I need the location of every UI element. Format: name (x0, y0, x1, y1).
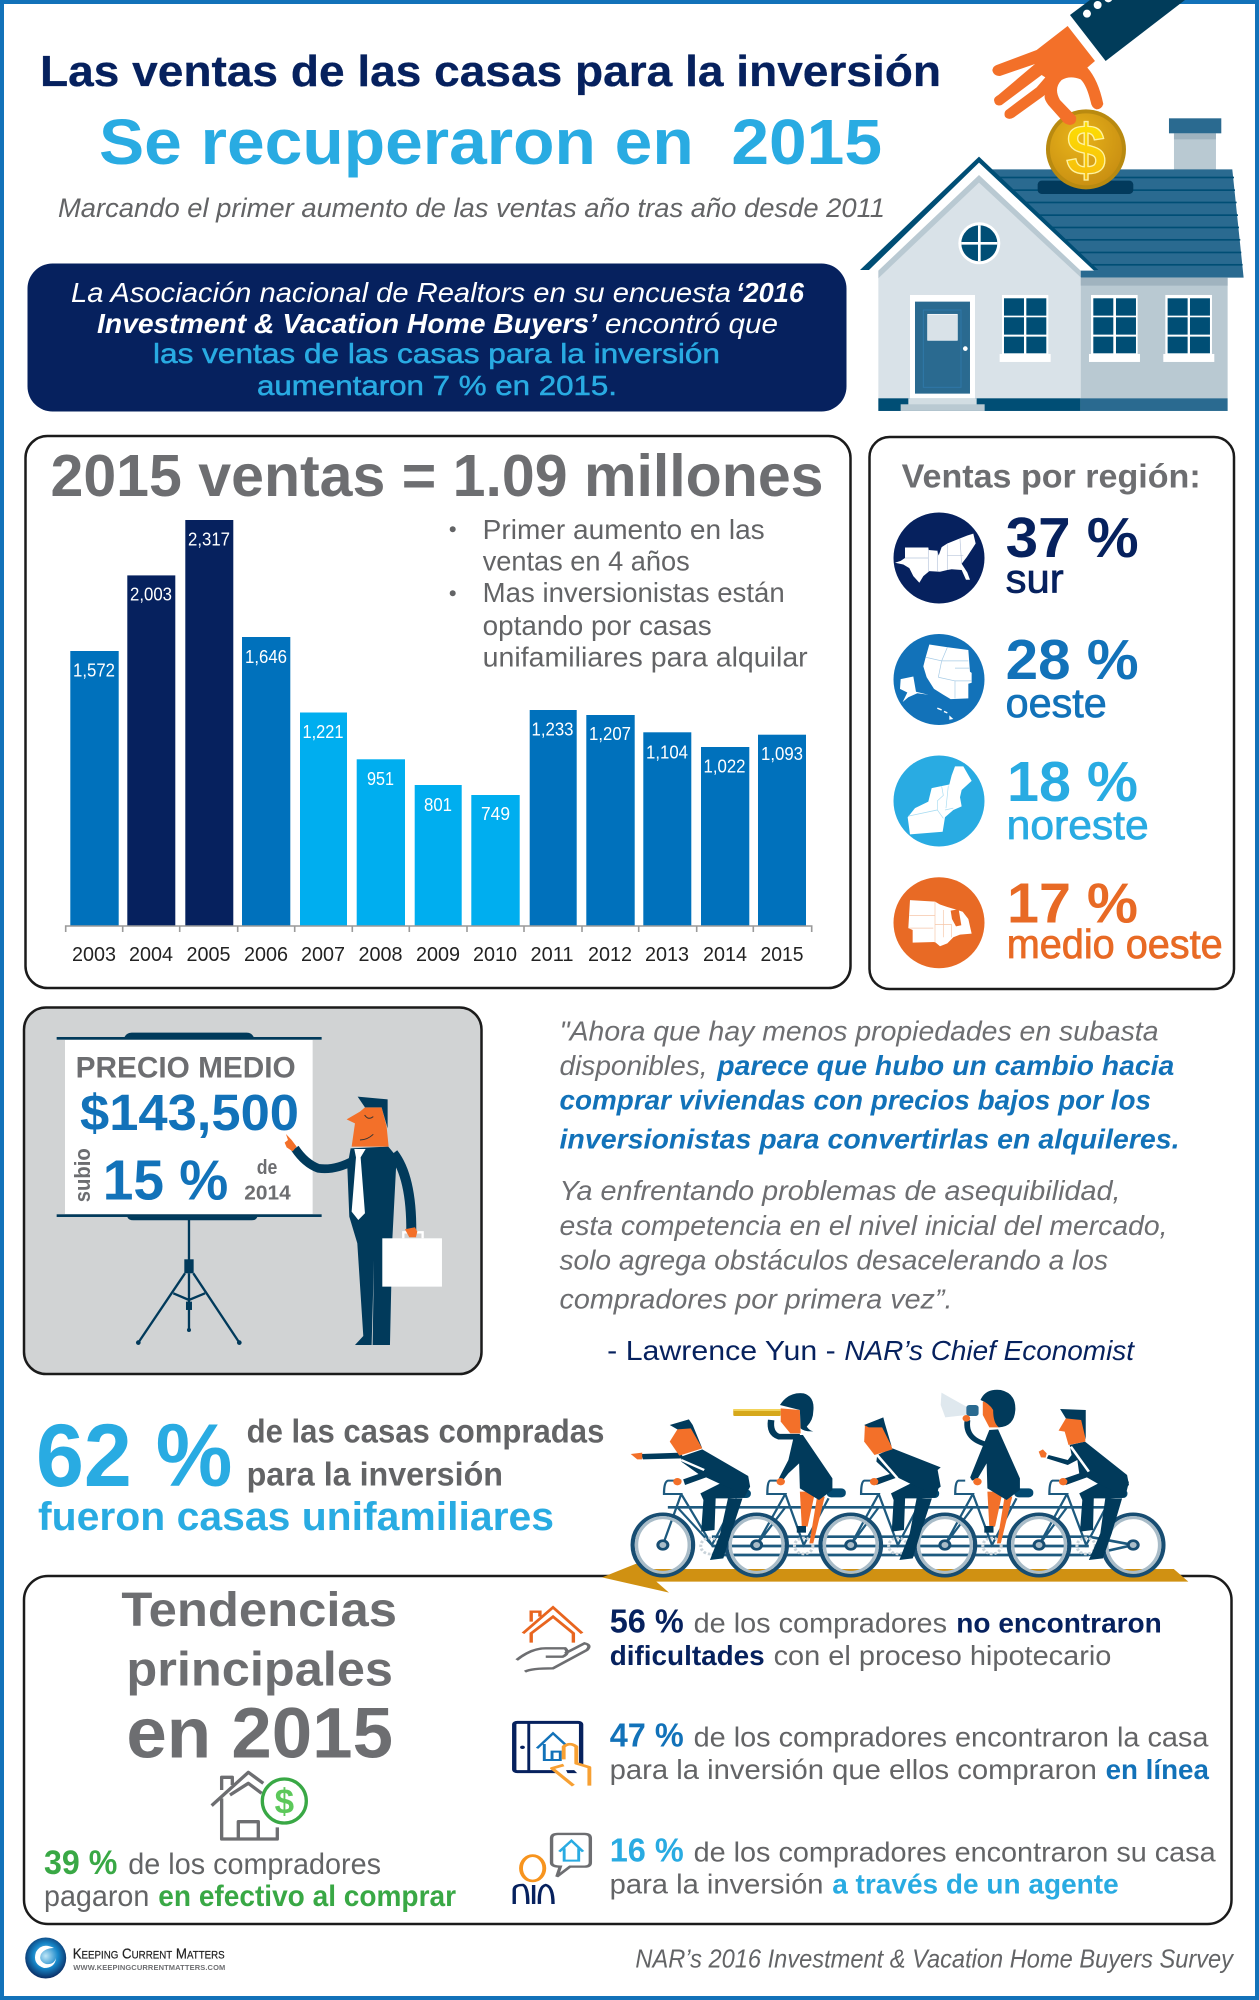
quote: esta competencia en el nivel inicial del mercado, (560, 1210, 1168, 1241)
bullet list: optando por casas (483, 610, 712, 641)
quote: inversionistas para convertirlas en alquileres. (560, 1123, 1180, 1154)
quote: "Ahora que hay menos propiedades en subasta (560, 1016, 1158, 1047)
bar chart: 1,104 (646, 742, 688, 762)
rider 3 (864, 1417, 941, 1560)
region: midwest (894, 872, 1223, 968)
panel: median price presentation (24, 1008, 482, 1374)
icon: gold coin (1046, 109, 1126, 191)
stat: 56 percent: dificultades (610, 1640, 765, 1671)
icon: house (860, 118, 1244, 411)
quote: comprar viviendas con precios bajos por los (560, 1084, 1151, 1115)
bar chart: 1,572 (73, 660, 115, 680)
stat: 56 percent: de los compradores (694, 1608, 947, 1639)
logo: Keeping Current Matters: Keeping Current Matters (73, 1945, 225, 1962)
stat: 56 percent (610, 1603, 1162, 1671)
arrow ground (602, 1563, 1188, 1593)
callout: survey summary: La Asociación nacional de Realtors en su encuesta (71, 277, 731, 308)
bar chart: 2014 (703, 944, 747, 966)
quote: compradores por primera vez”. (560, 1283, 952, 1314)
board text: 15 % (103, 1148, 228, 1212)
bar chart: 801 (424, 795, 452, 815)
illustration: hand dropping coin into house (860, 0, 1244, 411)
board text: 2014 (244, 1181, 291, 1204)
quote attribution (607, 1335, 1135, 1366)
icon: agent with speech bubble (514, 1834, 590, 1904)
quote: parece que hubo un cambio hacia (716, 1050, 1174, 1081)
region: south: sur (1006, 556, 1064, 602)
bar chart: 2,003 (130, 585, 172, 605)
icon: sleeve (1070, 0, 1185, 61)
callout: survey summary: las ventas de las casas para la inversión (153, 338, 720, 369)
rider 1 (631, 1419, 751, 1560)
bar chart: 2005 (186, 944, 230, 966)
board text: PRECIO MEDIO (76, 1051, 296, 1084)
board text: de (257, 1156, 277, 1179)
bar chart: 1,207 (589, 724, 631, 744)
bar chart: 2012 (588, 944, 632, 966)
stat: 39 percent cash (44, 1844, 456, 1913)
bar chart: 2015 (760, 944, 804, 966)
panel: sales chart (26, 436, 850, 988)
stat: 16 percent (610, 1832, 1216, 1899)
bicycle (633, 1481, 1163, 1576)
bar chart: 2009 (416, 944, 460, 966)
region: midwest: medio oeste (1007, 921, 1223, 967)
trends heading: en 2015 (126, 1695, 393, 1774)
board text: $143,500 (80, 1084, 299, 1141)
stat: 56 percent: no encontraron (956, 1608, 1162, 1639)
stat: 56 percent: 56 % (610, 1603, 684, 1640)
icon: swirl (25, 1938, 66, 1978)
callout: survey summary: Investment & Vacation Home Buyers’ (97, 308, 597, 339)
bar chart: 2,317 (188, 530, 230, 550)
stat: 47 percent: para la inversión que ellos compraron (610, 1754, 1097, 1785)
region: south: 37 % (1006, 506, 1139, 570)
region: northeast (894, 750, 1149, 848)
bar chart: 1,233 (532, 720, 574, 740)
region: west: oeste (1006, 680, 1107, 726)
callout: survey summary: ‘2016 (736, 277, 805, 308)
bar chart: 2006 (244, 944, 288, 966)
stat: 16 percent: para la inversión (610, 1868, 824, 1899)
rider 2 (733, 1393, 846, 1543)
stat: 56 percent: con el proceso hipotecario (774, 1640, 1111, 1671)
bullet list: unifamiliares para alquilar (483, 642, 808, 673)
tagline: Marcando el primer aumento de las ventas año tras año desde 2011 (58, 193, 885, 223)
trends heading (121, 1584, 397, 1774)
panel: main trends (24, 1576, 1232, 1924)
illustration: team on tandem bicycle (602, 1390, 1188, 1593)
panel: sales by region (870, 437, 1234, 989)
stat: 39 percent cash: pagaron (44, 1880, 149, 1913)
bar chart: 2010 (473, 944, 517, 966)
stat: 39 percent cash: de los compradores (128, 1848, 381, 1881)
region: south (894, 506, 1139, 604)
bullet list: ventas en 4 años (483, 546, 690, 577)
rider 4 (941, 1390, 1033, 1543)
logo: Keeping Current Matters: WWW.KEEPINGCURRENTMATTERS.COM (73, 1963, 225, 1972)
bar chart: 2008 (358, 944, 402, 966)
callout: survey summary: encontró que (605, 308, 778, 339)
region: west: 28 % (1006, 628, 1139, 692)
bar chart: 951 (367, 769, 394, 789)
quote attribution: - Lawrence Yun - (607, 1335, 836, 1366)
icon: house in hand (517, 1607, 589, 1672)
stat: 47 percent: 47 % (610, 1717, 684, 1754)
bullet list: Primer aumento en las (483, 514, 765, 545)
rider 5 (1039, 1409, 1129, 1560)
bar chart: 749 (481, 804, 510, 824)
quote: disponibles, (560, 1050, 708, 1081)
stat: 62 percent: para la inversión (247, 1456, 503, 1493)
region: midwest: 17 % (1007, 872, 1138, 936)
stat: 47 percent: de los compradores encontraron la casa (694, 1722, 1209, 1753)
subtitle headline: Se recuperaron en 2015 (99, 106, 882, 178)
chart heading: 2015 ventas = 1.09 millones (50, 443, 824, 509)
stat: 16 percent: a través de un agente (832, 1868, 1119, 1899)
icon: gold coin: $ (1066, 111, 1106, 191)
bullet list: Mas inversionistas están (483, 577, 785, 608)
board text (70, 1051, 299, 1212)
stat: 47 percent (610, 1717, 1209, 1785)
bar chart: 1,022 (704, 757, 746, 777)
bar chart: 2011 (530, 944, 574, 966)
bar chart: 1,646 (245, 647, 287, 667)
stat: 47 percent: en línea (1106, 1754, 1209, 1785)
quote (560, 1016, 1180, 1314)
stat: 62 percent: 62 % (36, 1405, 232, 1505)
region: northeast: 18 % (1007, 750, 1138, 814)
icon: businessman (285, 1097, 442, 1345)
icon: orange hand (992, 26, 1103, 125)
trends heading: principales (126, 1644, 393, 1697)
stat: 39 percent cash: 39 % (44, 1844, 117, 1882)
bar chart: 2003 (72, 944, 116, 966)
icon: house with dollar (212, 1772, 306, 1839)
quote: solo agrega obstáculos desacelerando a los (560, 1244, 1108, 1275)
icon: tablet with home (514, 1722, 589, 1786)
quote attribution: NAR’s Chief Economist (844, 1335, 1135, 1366)
title: Las ventas de las casas para la inversión (40, 47, 941, 96)
stat: 62 percent: de las casas compradas (247, 1413, 604, 1450)
stat: 62 percent: fueron casas unifamiliares (38, 1495, 554, 1539)
trends heading: Tendencias (121, 1584, 397, 1637)
bar chart (66, 520, 812, 966)
stat: 39 percent cash: en efectivo al comprar (158, 1880, 456, 1913)
callout: survey summary (28, 264, 846, 412)
stat: 16 percent: 16 % (610, 1832, 684, 1869)
quote: Ya enfrentando problemas de asequibilidad, (560, 1175, 1120, 1206)
bar chart: 2013 (645, 944, 689, 966)
bar chart: 2007 (301, 944, 345, 966)
callout: survey summary: aumentaron 7 % en 2015. (257, 370, 617, 401)
region heading: Ventas por región: (902, 458, 1201, 494)
icon: house with dollar: $ (275, 1782, 294, 1821)
icon: presentation board (57, 1033, 322, 1345)
board text: subio (70, 1148, 95, 1202)
bar chart: 2004 (129, 944, 173, 966)
stat: 62 percent (36, 1405, 604, 1539)
bar chart: 1,093 (761, 744, 803, 764)
bullet list (450, 514, 808, 673)
stat: 16 percent: de los compradores encontraron su casa (694, 1837, 1216, 1868)
region: northeast: noreste (1007, 802, 1149, 848)
region: west (894, 628, 1139, 726)
logo: Keeping Current Matters (25, 1938, 225, 1978)
bar chart: 1,221 (302, 722, 344, 742)
